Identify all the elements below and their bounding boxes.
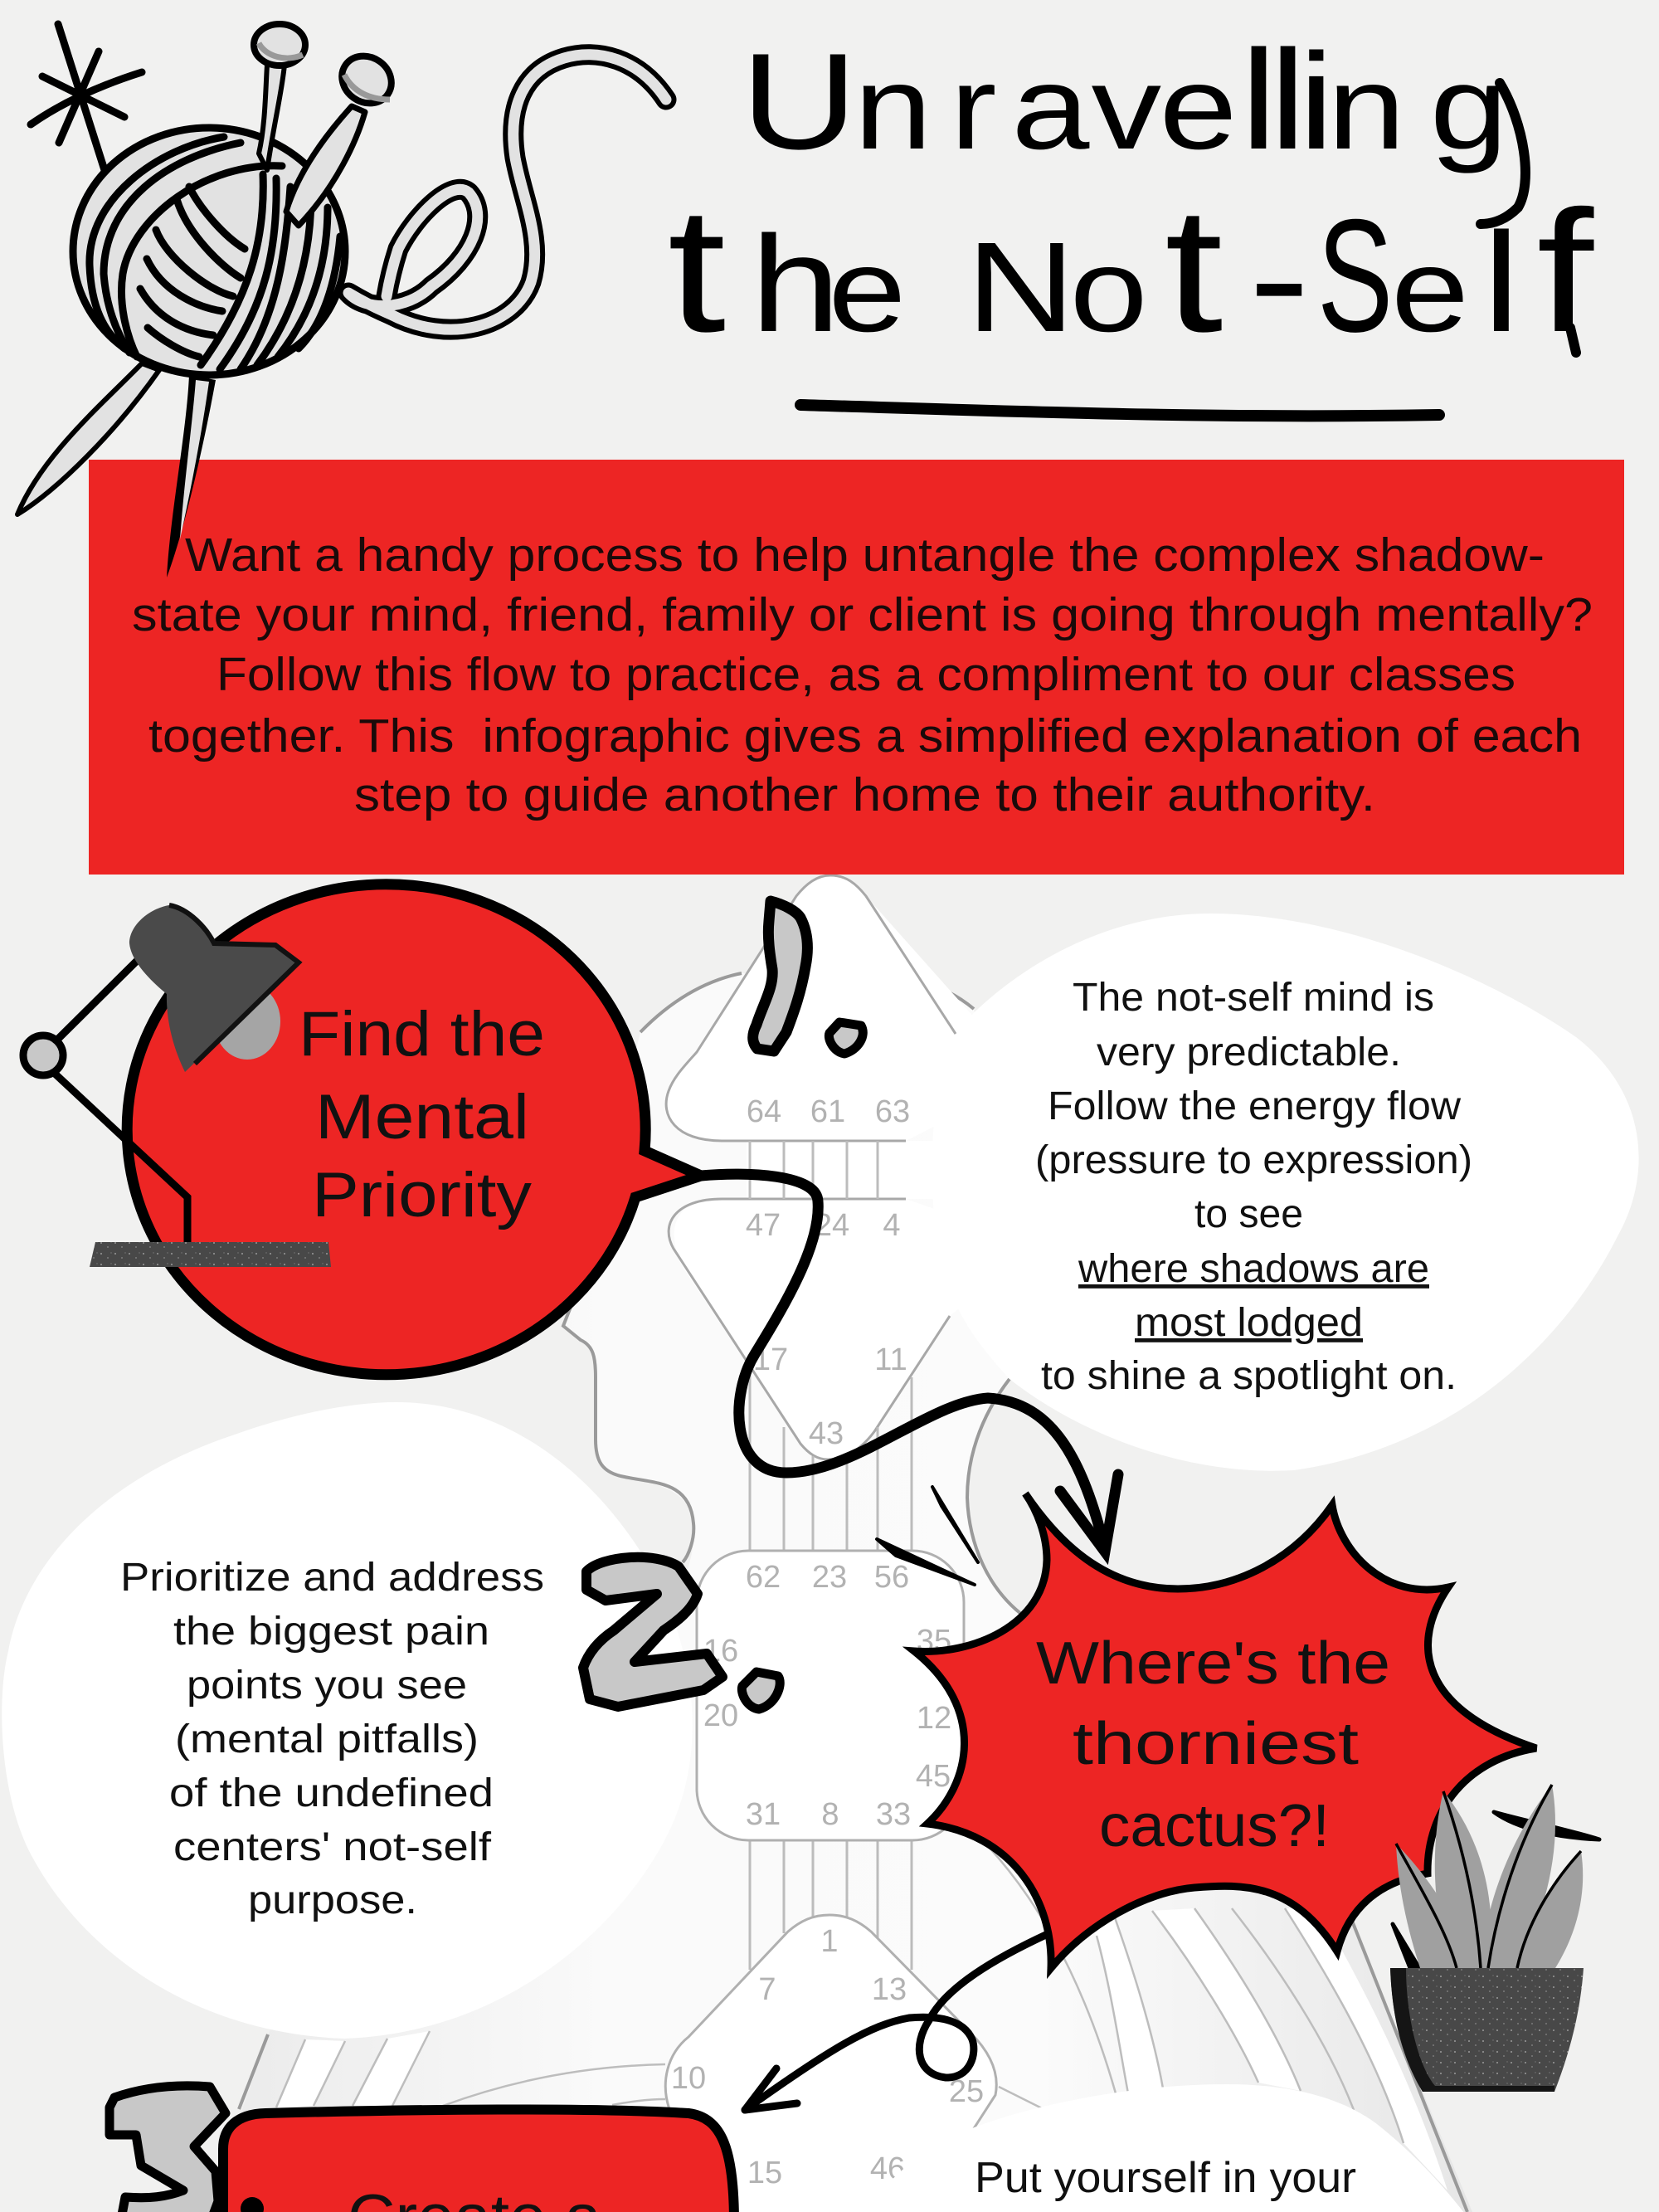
burst heading: cactus?! [1099, 1793, 1330, 1859]
gate numbers: 43 [809, 1416, 844, 1451]
gate numbers: 62 [746, 1560, 781, 1595]
burst heading: Where's the [1036, 1630, 1390, 1697]
step 1 text: most lodged [1135, 1301, 1363, 1345]
step 1 text: to see [1194, 1192, 1303, 1236]
throat center [697, 1551, 964, 1840]
gate numbers: 17 [753, 1342, 788, 1377]
gate numbers: 16 [703, 1634, 738, 1669]
title line 1: l [1240, 21, 1277, 179]
heading: Mental [315, 1082, 529, 1152]
gate numbers: 4 [883, 1208, 901, 1243]
burst accent strokes [877, 1487, 978, 1585]
gate numbers: 46 [870, 2151, 905, 2186]
gate numbers: 25 [949, 2074, 984, 2109]
burst heading [1036, 1630, 1390, 1859]
title line 2: - [1248, 192, 1310, 364]
panel: intro [89, 460, 1624, 875]
title line 1: n [1327, 41, 1405, 174]
burst heading: thorniest [1073, 1711, 1359, 1777]
gate numbers: 23 [812, 1560, 847, 1595]
step 2 text: (mental pitfalls) [175, 1717, 479, 1761]
title line 2: e [1391, 224, 1469, 357]
title line 2: S [1317, 185, 1393, 366]
step 2 text [120, 1556, 544, 1922]
title line 2: t [1165, 169, 1223, 369]
gate numbers: 10 [671, 2061, 706, 2096]
title [668, 21, 1594, 369]
title line 1 [741, 21, 1525, 224]
title line 1: v [1092, 41, 1161, 174]
gate numbers: 12 [917, 1701, 951, 1736]
gate numbers: 64 [747, 1094, 781, 1129]
title line 2: h [751, 207, 840, 361]
yarn thread [348, 55, 666, 329]
title line 2: e [828, 224, 906, 357]
bodygraph figure background [207, 875, 1472, 2212]
title line 2: N [966, 215, 1075, 358]
intro text: Want a handy process to help untangle the complex shadow- [185, 529, 1545, 582]
gate numbers: 1 [820, 1924, 839, 1959]
ajna center triangle [674, 1199, 1037, 1459]
icon: desk lamp [23, 905, 331, 1267]
title line 1: n [854, 41, 932, 174]
step 1 text: where shadows are [1078, 1247, 1429, 1291]
yarn ball illustration [17, 24, 666, 577]
gate numbers: 15 [747, 2156, 782, 2190]
title line 1: U [741, 25, 858, 178]
step 2 text: purpose. [248, 1878, 417, 1922]
title line 1: i [1298, 25, 1335, 178]
starburst: where's the thorniest cactus [914, 1493, 1536, 1968]
step 1 text [1035, 976, 1472, 1398]
title line 1: l [1269, 21, 1306, 179]
channel lines [750, 1141, 912, 1970]
title line 1: a [1011, 41, 1090, 174]
icon: potted plant [1390, 1785, 1599, 2092]
curved arrow: cactus to step 3 [745, 1933, 1049, 2110]
gate numbers: 31 [746, 1797, 781, 1832]
heading [299, 999, 545, 1230]
step 2 text: points you see [187, 1664, 467, 1708]
red speech circle: find the mental priority [127, 884, 701, 1375]
gate numbers: 24 [815, 1208, 849, 1243]
g center diamond [665, 1915, 996, 2212]
step 2 text: the biggest pain [173, 1610, 489, 1654]
step 2 text: Prioritize and address [120, 1556, 544, 1600]
speech bubble: step 4 text [863, 2084, 1472, 2212]
title line 1: e [1159, 41, 1237, 174]
curved arrow: step 1 to cactus [701, 1174, 1118, 1552]
big number 1 [753, 901, 863, 1054]
title line 2 [668, 169, 1594, 369]
step 1 text: very predictable. [1097, 1030, 1401, 1074]
intro text: together. This infographic gives a simplified explanation of each [148, 709, 1582, 763]
intro text: step to guide another home to their authority. [354, 768, 1375, 821]
gate numbers: 33 [876, 1797, 911, 1832]
step 2 text: of the undefined [169, 1771, 494, 1815]
gate numbers: 35 [917, 1624, 951, 1659]
title underline [800, 405, 1439, 416]
silhouette outline [239, 973, 1467, 2212]
white band between head and ajna [747, 1141, 1012, 1199]
gate numbers: 45 [916, 1759, 951, 1794]
title line 2: l [1482, 203, 1520, 362]
shoulder stripes [276, 1846, 1447, 2190]
gate numbers: 20 [703, 1698, 738, 1733]
head center triangle [666, 875, 1029, 1141]
gate numbers: 56 [874, 1560, 909, 1595]
title line 1: g [1430, 41, 1508, 174]
title line 2: o [1070, 224, 1148, 357]
heading: Priority [312, 1160, 532, 1230]
needle tips [17, 363, 216, 577]
intro text: state your mind, friend, family or client is going through mentally? [132, 588, 1593, 641]
title line 2: t [668, 169, 726, 369]
step 1 text: Follow the energy flow [1048, 1084, 1461, 1128]
head and body silhouette [207, 973, 1472, 2212]
heading: Find the [299, 999, 545, 1069]
ball [73, 128, 345, 375]
title line 2: f [1536, 175, 1594, 368]
gate numbers: 47 [746, 1208, 781, 1243]
speech bubble: step 2 text [2, 1402, 693, 2039]
big number 2 [583, 1557, 780, 1709]
panel: step 3 create a [223, 2109, 734, 2212]
knitting needles [254, 24, 401, 226]
step 2 text: centers' not-self [173, 1825, 492, 1869]
gate numbers: 63 [875, 1094, 910, 1129]
title line 1: r [950, 41, 997, 174]
gate numbers: 7 [758, 1972, 776, 2007]
intro text: Follow this flow to practice, as a compliment to our classes [216, 648, 1515, 701]
step 1 text: The not-self mind is [1073, 976, 1434, 1020]
asterisk spark [31, 24, 142, 170]
gate numbers: 13 [872, 1972, 907, 2007]
gate numbers [671, 1094, 984, 2190]
gate numbers: 61 [810, 1094, 845, 1129]
gate numbers: 8 [821, 1797, 839, 1832]
gate numbers: 11 [874, 1342, 907, 1377]
big number 3 [109, 2086, 226, 2212]
speech bubble: step 1 text [932, 914, 1639, 1471]
step 4 text: Put yourself in your [975, 2154, 1356, 2202]
number 3 dot [241, 2197, 264, 2212]
step 1 text: to shine a spotlight on. [1041, 1354, 1457, 1398]
step 1 text: (pressure to expression) [1035, 1138, 1472, 1182]
intro text [132, 529, 1593, 821]
